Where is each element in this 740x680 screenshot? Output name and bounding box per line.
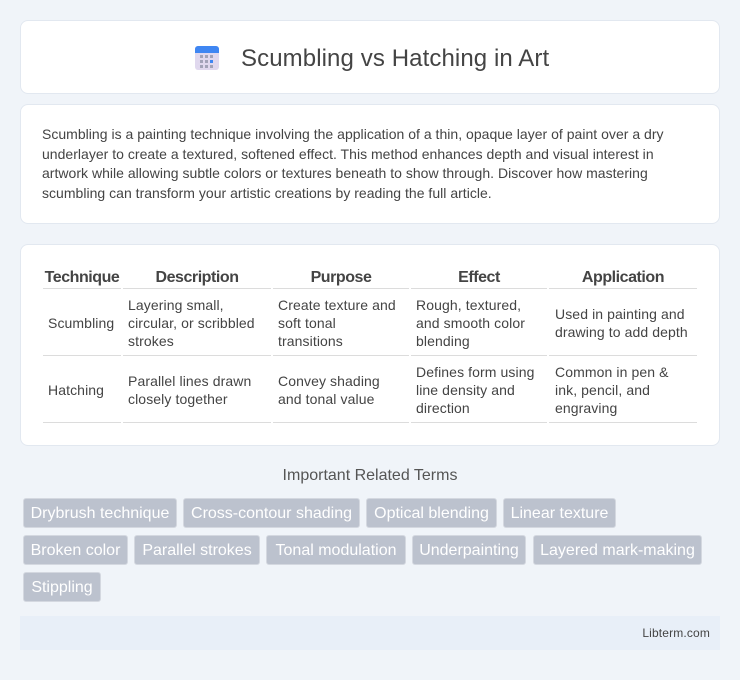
panel: comparison table: [20, 244, 720, 446]
related terms tags: Optical blending: [374, 505, 489, 522]
table header row: Technique: [45, 269, 119, 286]
related terms tags: Tonal modulation: [276, 542, 396, 559]
intro text: scumbling can transform your artistic creations by reading the full article.: [42, 185, 492, 201]
row: Scumbling: transitions: [278, 333, 343, 349]
row: Scumbling: Rough, textured,: [416, 297, 521, 313]
row: Scumbling: strokes: [128, 333, 174, 349]
footer bar: [20, 616, 720, 650]
related terms tags: Drybrush technique: [31, 505, 169, 522]
row: Scumbling: soft tonal: [278, 315, 336, 331]
row: Hatching: engraving: [555, 400, 617, 416]
row: Hatching: closely together: [128, 391, 228, 407]
row: Hatching: direction: [416, 400, 470, 416]
related terms tags: Stippling: [31, 579, 93, 596]
table header row: Effect: [458, 269, 500, 286]
row: Scumbling: Used in painting and: [555, 306, 685, 322]
intro text: artwork while allowing subtle colors or textures beneath to show through. Discover how mastering: [42, 165, 648, 181]
related terms tags: Broken color: [31, 542, 120, 559]
intro text: [42, 126, 664, 201]
related terms tags: Linear texture: [511, 505, 608, 522]
intro panel: [20, 104, 720, 224]
row: Scumbling: drawing to add depth: [555, 324, 688, 340]
title: Scumbling vs Hatching in Art: [241, 45, 549, 72]
footer credit: Libterm.com: [642, 626, 710, 640]
row: Hatching: Defines form using: [416, 364, 535, 380]
intro text: Scumbling is a painting technique involving the application of a thin, opaque layer of paint over a dry: [42, 126, 664, 142]
row: Scumbling: [48, 297, 688, 349]
icon: calendar: [195, 46, 219, 70]
row: Scumbling: circular, or scribbled: [128, 315, 255, 331]
row: Scumbling: Create texture and: [278, 297, 396, 313]
related terms tags: Cross-contour shading: [191, 505, 352, 522]
row: Scumbling: Scumbling: [48, 315, 114, 331]
related terms heading: Important Related Terms: [283, 467, 457, 484]
related terms tags: Parallel strokes: [142, 542, 252, 559]
table header row: Description: [155, 269, 239, 286]
intro text: underlayer to create a textured, softened effect. This method enhances depth and visual interest in: [42, 146, 654, 162]
row: Hatching: Common in pen &: [555, 364, 669, 380]
related terms tags: Underpainting: [419, 542, 519, 559]
row: Hatching: [48, 364, 669, 416]
table header row: Purpose: [311, 269, 371, 286]
row: Scumbling: Layering small,: [128, 297, 224, 313]
related terms tags: Layered mark-making: [540, 542, 695, 559]
table header row: [44, 269, 664, 286]
row: Hatching: and tonal value: [278, 391, 374, 407]
table header row: Application: [582, 269, 664, 286]
related terms tags: [23, 498, 702, 602]
row: Hatching: Hatching: [48, 382, 104, 398]
row: Hatching: line density and: [416, 382, 515, 398]
row: Scumbling: and smooth color: [416, 315, 525, 331]
row: Hatching: ink, pencil, and: [555, 382, 650, 398]
row: Scumbling: blending: [416, 333, 470, 349]
row: Hatching: Convey shading: [278, 373, 380, 389]
row: Hatching: Parallel lines drawn: [128, 373, 251, 389]
header card: [20, 20, 720, 94]
